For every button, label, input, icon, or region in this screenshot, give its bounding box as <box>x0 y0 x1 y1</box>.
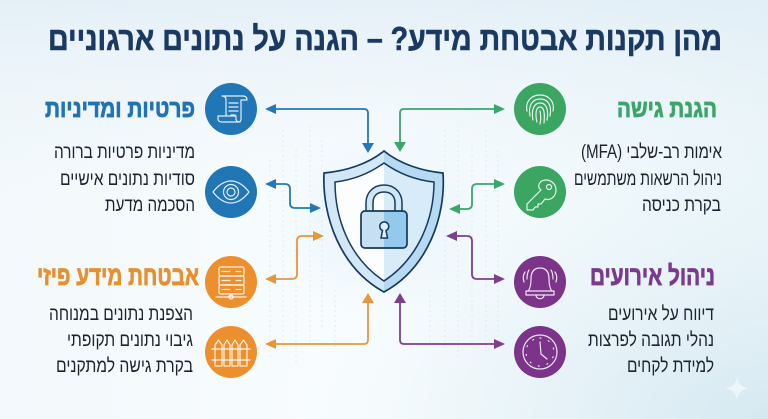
text block: privacy items: הסכמה מדעת <box>105 194 195 216</box>
central shield with padlock <box>324 151 443 292</box>
icon: server rack <box>205 256 257 308</box>
panel: access protection <box>394 83 722 218</box>
text block: physical items: הצפנת נתונים במנוחה <box>49 303 193 325</box>
panel: incident management <box>394 231 715 378</box>
text block: privacy items <box>54 141 195 216</box>
icon: policy scroll <box>205 83 257 135</box>
text block: physical items: בקרת גישה למתקנים <box>56 355 193 377</box>
text block: access items <box>574 141 722 216</box>
heading: privacy and policies: פרטיות ומדיניות <box>45 95 195 123</box>
icon: fence <box>205 326 257 378</box>
icon: clock <box>514 326 566 378</box>
heading: physical security: אבטחת מידע פיזי <box>37 261 199 291</box>
icon: eye <box>205 166 257 218</box>
arrow: privacy to shield <box>265 104 374 153</box>
icon: fingerprint <box>514 83 566 135</box>
arrow: bell to shield <box>446 231 505 284</box>
arrow: clock to shield <box>394 293 505 349</box>
padlock <box>361 185 407 248</box>
panel: physical security <box>37 231 374 378</box>
arrow: key to shield <box>449 179 505 214</box>
text block: privacy items: מדיניות פרטיות ברורה <box>54 141 195 163</box>
text block: incident items: דיווח על אירועים <box>608 303 714 325</box>
text block: incident items <box>588 303 714 377</box>
text block: incident items: נהלי תגובה לפרצות <box>588 329 714 351</box>
text block: privacy items: סודיות נתונים אישיים <box>60 168 195 190</box>
arrow: fence to shield <box>265 293 374 349</box>
text block: physical items: גיבוי נתונים תקופתי <box>67 329 193 351</box>
arrow: eye to shield <box>265 179 321 213</box>
icon: sparkle <box>725 376 749 401</box>
text block: access items: אימות רב-שלבי (MFA) <box>581 141 722 163</box>
panel: privacy and policies <box>45 83 374 218</box>
arrow: fingerprint to shield <box>394 104 505 152</box>
text block: access items: בקרת כניסה <box>642 194 721 216</box>
text block: incident items: למידת לקחים <box>627 355 714 377</box>
icon: bell <box>514 256 566 308</box>
arrow: server to shield <box>265 231 324 284</box>
heading: incident management: ניהול אירועים <box>590 261 715 291</box>
icon: key <box>514 166 566 218</box>
heading: access protection: הגנת גישה <box>617 95 717 123</box>
text block: physical items <box>49 303 193 377</box>
